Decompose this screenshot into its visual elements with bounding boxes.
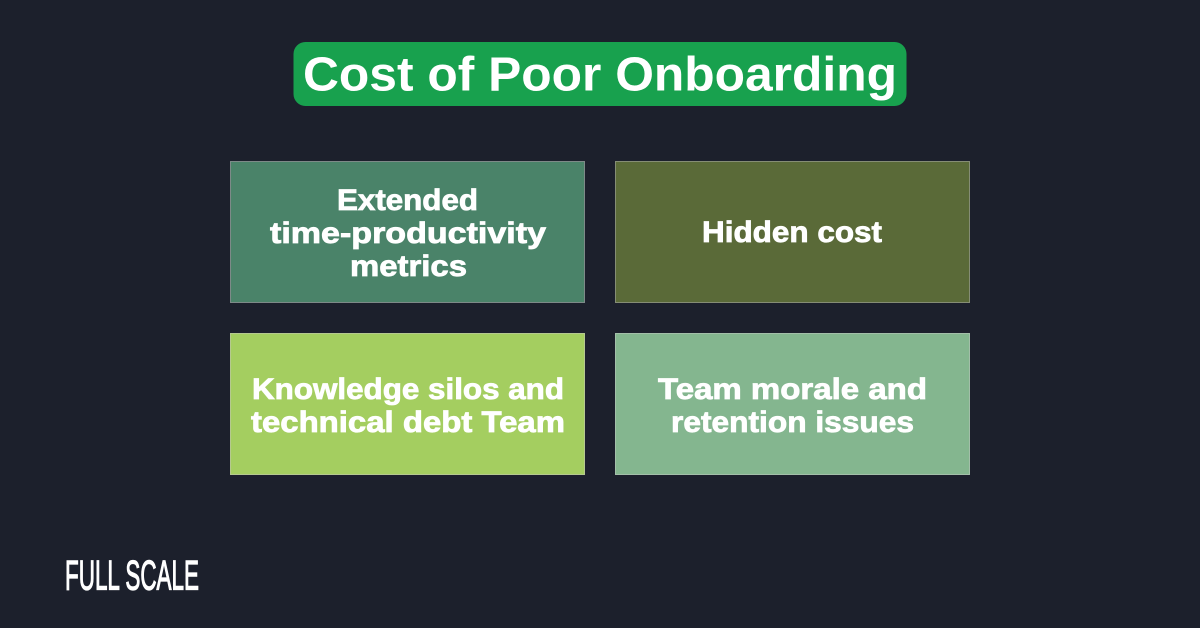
panel: hidden cost — [616, 162, 970, 302]
panel: hidden cost: Hidden cost — [702, 216, 882, 249]
panel: knowledge silos and technical debt: technical debt Team — [251, 406, 565, 439]
panel: extended time-productivity metrics: Extended — [337, 184, 478, 217]
panel: extended time-productivity metrics: metrics — [350, 250, 467, 283]
panel: knowledge silos and technical debt: Knowledge silos and — [252, 373, 564, 406]
panel: team morale and retention issues: retention issues — [671, 406, 914, 439]
panel: extended time-productivity metrics: time-productivity — [270, 217, 546, 250]
panel: extended time-productivity metrics — [230, 162, 584, 302]
logo: full scale wordmark: FULL SCALE — [65, 552, 199, 598]
title: Cost of Poor Onboarding — [303, 48, 897, 102]
panel: team morale and retention issues — [616, 334, 970, 474]
panel: team morale and retention issues: Team morale and — [658, 373, 927, 406]
panel: knowledge silos and technical debt — [230, 334, 584, 474]
